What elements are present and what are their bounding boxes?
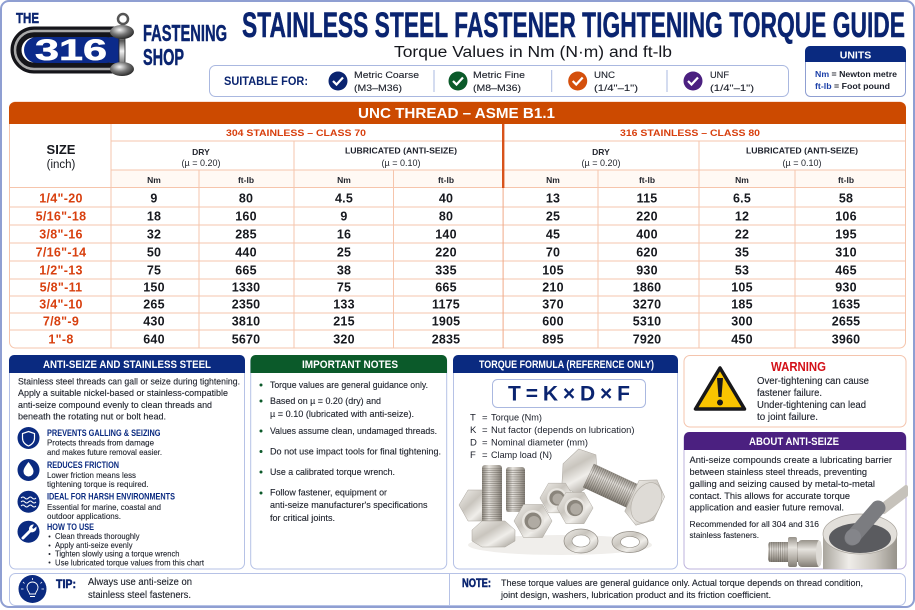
row 1/2-13 <box>39 264 857 278</box>
tip text: TIP: <box>56 577 76 591</box>
row 7/16-14 <box>36 246 857 260</box>
about text: application and easier future removal. <box>690 502 844 514</box>
row 5/16-18: 80 <box>439 210 453 224</box>
UNC: UNC <box>594 70 615 81</box>
row 3/8-16: 45 <box>546 228 560 242</box>
notes list: µ = 0.10 (lubricated with anti-seize). <box>270 409 414 420</box>
table banner: UNC THREAD – ASME B1.1 <box>358 105 555 122</box>
row 3/4-10: 1175 <box>432 298 460 312</box>
group headers <box>182 128 858 168</box>
row 1/2-13: 38 <box>337 264 351 278</box>
group headers: (µ = 0.20) <box>582 158 620 168</box>
logo: The 316 Fastening Shop: SHOP <box>143 44 184 70</box>
row 1-8: 5670 <box>232 332 260 346</box>
row 3/8-16: 16 <box>337 228 351 242</box>
row 1/4-20: 9 <box>150 192 158 206</box>
group headers: LUBRICATED (ANTI-SEIZE) <box>746 146 858 156</box>
row 3/8-16: 195 <box>835 228 857 242</box>
size column header <box>47 142 76 171</box>
row 3/8-16: 400 <box>636 228 658 242</box>
row 7/16-14: 220 <box>435 246 457 260</box>
row 5/16-18: 106 <box>835 210 857 224</box>
formula legend: D <box>470 438 477 448</box>
how to use: Use lubricated torque values from this chart <box>55 557 205 567</box>
warning text: fastener failure. <box>757 388 822 399</box>
unit header row: Nm <box>147 175 161 185</box>
row 5/16-18 <box>36 210 857 224</box>
tip text: Always use anti-seize on <box>88 577 192 588</box>
intro text: Apply a suitable nickel-based or stainless-compatible <box>18 388 228 399</box>
tip and note bar <box>10 574 906 606</box>
warning text: Over-tightening can cause <box>757 376 869 387</box>
row 1/2-13: 1/2"-13 <box>39 264 83 278</box>
formula legend: Nominal diameter (mm) <box>491 438 588 448</box>
how to use: HOW TO USE <box>47 522 94 533</box>
how to use: Tighten slowly using a torque wrench <box>55 549 180 559</box>
panel: about anti-seize <box>684 432 906 569</box>
benefit: harsh environments <box>47 492 175 521</box>
note text <box>462 576 863 601</box>
table banner <box>9 102 906 124</box>
UNC <box>568 70 638 94</box>
how to use: Clean threads thoroughly <box>55 531 140 541</box>
notes list: Follow fastener, equipment or <box>270 488 387 498</box>
unit header row: ft-lb <box>838 175 854 185</box>
row 1-8: 7920 <box>633 332 661 346</box>
panel: anti-seize and stainless steel <box>9 355 245 569</box>
icon: shield <box>18 427 40 449</box>
unit header row: Nm <box>337 175 351 185</box>
row 7/16-14: 440 <box>235 246 257 260</box>
row 7/16-14: 35 <box>735 246 749 260</box>
row 1/4-20: 13 <box>546 192 560 206</box>
benefit: harsh environments: IDEAL FOR HARSH ENVIRONMENTS <box>47 492 175 502</box>
benefit: reduces friction <box>47 460 148 489</box>
row 3/4-10: 265 <box>143 298 165 312</box>
notes list: for critical joints. <box>270 513 335 524</box>
metric coarse: (M3–M36) <box>354 83 402 94</box>
benefit: harsh environments: Essential for marine, coastal and <box>47 502 161 512</box>
group headers: LUBRICATED (ANTI-SEIZE) <box>345 146 457 156</box>
formula legend: = <box>482 425 488 436</box>
row 1/2-13: 665 <box>235 264 257 278</box>
row 5/8-11: 1860 <box>633 280 661 294</box>
how to use: Apply anti-seize evenly <box>55 540 133 550</box>
row 1/4-20: 6.5 <box>733 192 751 206</box>
row 7/8-9: 2655 <box>832 314 860 328</box>
formula legend: = <box>482 438 488 448</box>
group headers: (µ = 0.10) <box>382 158 420 168</box>
suitable for bar: SUITABLE FOR: <box>224 74 308 88</box>
icon: warning triangle <box>696 368 744 409</box>
row 7/8-9: 1905 <box>432 314 460 328</box>
unit header row <box>147 175 854 185</box>
formula legend: Clamp load (N) <box>491 450 552 461</box>
icon: water drop <box>18 459 40 481</box>
row 5/8-11: 105 <box>731 280 753 294</box>
row 3/4-10: 133 <box>333 298 355 312</box>
about text: stainless fasteners. <box>690 530 759 540</box>
unit header row: ft-lb <box>438 175 454 185</box>
tip text: stainless steel fasteners. <box>88 590 191 601</box>
row 3/8-16: 22 <box>735 228 749 242</box>
panel: anti-seize and stainless steel: ANTI-SEIZE AND STAINLESS STEEL <box>43 359 211 371</box>
unit header row: Nm <box>735 175 749 185</box>
row 5/8-11 <box>40 280 857 294</box>
subtitle: Torque Values in Nm (N·m) and ft-lb <box>394 44 672 61</box>
benefit: prevents galling: Protects threads from damage <box>47 438 154 448</box>
row 5/8-11: 5/8"-11 <box>40 280 82 294</box>
row 1-8: 2835 <box>432 332 460 346</box>
row 7/8-9: 600 <box>542 314 564 328</box>
metric fine: Metric Fine <box>473 70 525 81</box>
row 7/8-9: 5310 <box>633 314 661 328</box>
units box: Nm = Newton metre <box>815 70 898 79</box>
row 1/2-13: 930 <box>636 264 658 278</box>
UNF: (1/4"–1") <box>710 83 754 94</box>
row 5/16-18: 9 <box>340 210 348 224</box>
notes list: anti-seize manufacturer's specifications <box>270 500 428 511</box>
row 7/16-14: 310 <box>835 246 857 260</box>
about text: galling and seizing caused by metal-to-metal <box>690 479 875 490</box>
formula: T = K × D × F <box>508 383 630 406</box>
row 5/16-18: 25 <box>546 210 560 224</box>
about text: Anti-seize compounds create a lubricating barrier <box>690 455 892 466</box>
row 1-8: 895 <box>542 332 564 346</box>
warning text: Under-tightening can lead <box>757 400 866 411</box>
image: bolt <box>768 537 822 567</box>
formula legend: = <box>482 413 488 424</box>
row 1/4-20 <box>39 192 853 206</box>
group headers: DRY <box>192 147 210 157</box>
UNC: (1/4"–1") <box>594 83 638 94</box>
metric fine: (M8–M36) <box>473 83 521 94</box>
row 1-8 <box>48 332 860 346</box>
formula legend: K <box>470 425 477 436</box>
panel: warning <box>684 356 906 427</box>
group headers: DRY <box>592 147 610 157</box>
how to use <box>47 522 205 567</box>
row 1-8: 3960 <box>832 332 860 346</box>
UNF: UNF <box>710 70 729 81</box>
torque table: UNC thread <box>9 102 906 348</box>
units box: ft-lb = Foot pound <box>815 82 890 91</box>
row 1-8: 450 <box>731 332 753 346</box>
benefit: reduces friction: tightening torque is required. <box>47 479 148 489</box>
row 7/8-9: 3810 <box>232 314 260 328</box>
formula <box>492 380 646 408</box>
unit header row: ft-lb <box>238 175 254 185</box>
image: anti-seize jar and spatula <box>823 487 906 569</box>
big bolt <box>552 441 670 531</box>
row 3/8-16 <box>39 228 857 242</box>
benefit: prevents galling <box>47 428 162 457</box>
row 7/16-14: 70 <box>546 246 560 260</box>
benefit: prevents galling: and makes future removal easier. <box>47 447 162 457</box>
about text: between stainless steel threads, preventing <box>690 467 867 478</box>
panel: torque formula <box>453 355 678 569</box>
formula legend: Torque (Nm) <box>491 413 542 424</box>
notes list: Do not use impact tools for final tightening. <box>270 446 441 458</box>
row 7/16-14: 25 <box>337 246 351 260</box>
row 5/16-18: 12 <box>735 210 749 224</box>
warning text <box>757 376 869 423</box>
row 3/8-16: 3/8"-16 <box>39 228 83 242</box>
row 1/4-20: 40 <box>439 192 453 206</box>
metric coarse: Metric Coarse <box>354 70 419 81</box>
row 3/4-10: 2350 <box>232 298 260 312</box>
row 7/8-9: 430 <box>143 314 165 328</box>
row 5/16-18: 5/16"-18 <box>36 210 86 224</box>
tip text <box>56 577 192 601</box>
row 5/8-11: 1330 <box>232 280 260 294</box>
row 1/4-20: 58 <box>839 192 853 206</box>
icon: waves <box>18 491 40 513</box>
panel: important notes <box>250 355 447 569</box>
row 3/4-10: 3/4"-10 <box>39 298 83 312</box>
formula legend: = <box>482 450 488 461</box>
panel: about anti-seize: ABOUT ANTI-SEIZE <box>749 436 839 448</box>
row 1/4-20: 115 <box>637 192 657 206</box>
row 7/8-9: 7/8"-9 <box>43 314 79 328</box>
group headers: (µ = 0.10) <box>783 158 821 168</box>
logo: The 316 Fastening Shop: FASTENING <box>143 20 227 46</box>
row 3/4-10: 370 <box>542 298 564 312</box>
icon: light bulb <box>18 575 46 603</box>
row 1/4-20: 1/4"-20 <box>39 192 83 206</box>
metric fine <box>448 70 525 94</box>
size column header: (inch) <box>47 159 76 171</box>
notes list: Values assume clean, undamaged threads. <box>270 426 437 437</box>
notes list: Use a calibrated torque wrench. <box>270 467 395 478</box>
row 1-8: 320 <box>333 332 355 346</box>
row 1-8: 640 <box>143 332 165 346</box>
intro text: beneath the rotating nut or bolt head. <box>18 412 166 422</box>
benefit: harsh environments: outdoor applications. <box>47 511 121 521</box>
logo: The 316 Fastening Shop <box>15 10 227 76</box>
row 5/8-11: 210 <box>542 280 564 294</box>
formula legend: T <box>470 413 476 424</box>
notes list <box>270 380 441 524</box>
row 5/16-18: 18 <box>147 210 161 224</box>
UNF <box>684 70 754 94</box>
row 1/2-13: 53 <box>735 264 749 278</box>
row 7/16-14: 50 <box>147 246 161 260</box>
row 3/4-10 <box>39 298 860 312</box>
formula legend: Nut factor (depends on lubrication) <box>491 425 634 436</box>
row 1/2-13: 75 <box>147 264 161 278</box>
group headers: (µ = 0.20) <box>182 158 220 168</box>
row 7/8-9 <box>43 314 860 328</box>
row 3/4-10: 185 <box>731 298 753 312</box>
group headers: 316 STAINLESS – CLASS 80 <box>620 128 760 139</box>
about text <box>690 455 892 540</box>
row 7/16-14: 620 <box>636 246 658 260</box>
units box <box>805 46 906 96</box>
row 1-8: 1"-8 <box>48 332 74 346</box>
row 7/8-9: 300 <box>731 314 753 328</box>
row 3/4-10: 1635 <box>832 298 860 312</box>
note text: joint design, washers, lubrication product and its friction coefficient. <box>500 590 771 601</box>
row 5/8-11: 75 <box>337 280 351 294</box>
row 5/8-11: 150 <box>143 280 165 294</box>
logo: The 316 Fastening Shop: THE <box>16 10 39 27</box>
benefit: reduces friction: REDUCES FRICTION <box>47 460 119 471</box>
icon: wrench <box>18 521 40 543</box>
row 3/8-16: 140 <box>435 228 457 242</box>
washers <box>564 529 598 553</box>
row 1/4-20: 80 <box>239 192 253 206</box>
row 7/8-9: 215 <box>333 314 355 328</box>
benefit: reduces friction: Lower friction means less <box>47 470 136 480</box>
row 7/16-14: 7/16"-14 <box>36 246 86 260</box>
row 5/16-18: 220 <box>636 210 658 224</box>
suitable for bar <box>210 66 788 96</box>
row 1/2-13: 465 <box>835 264 857 278</box>
notes list: Torque values are general guidance only. <box>270 380 428 391</box>
formula legend <box>470 413 634 461</box>
metric coarse <box>328 70 419 94</box>
logo: The 316 Fastening Shop: 316 <box>35 34 107 67</box>
row 1/2-13: 105 <box>542 264 564 278</box>
intro text: anti-seize compound evenly to clean threads and <box>18 400 212 411</box>
panel: torque formula: TORQUE FORMULA (REFERENCE ONLY) <box>479 359 654 371</box>
unit header row: ft-lb <box>639 175 655 185</box>
warning text: to joint failure. <box>757 412 818 423</box>
group headers: 304 STAINLESS – CLASS 70 <box>226 128 366 139</box>
note text: These torque values are general guidance only. Actual torque depends on thread condition, <box>501 578 863 589</box>
row 5/8-11: 665 <box>435 280 457 294</box>
upright bolts <box>506 467 525 512</box>
row 1/4-20: 4.5 <box>335 192 353 206</box>
bullets <box>260 384 262 494</box>
about text: Recommended for all 304 and 316 <box>690 519 819 529</box>
intro text: Stainless steel threads can gall or seize during tightening. <box>18 376 240 388</box>
row 5/8-11: 930 <box>835 280 857 294</box>
panel: important notes: IMPORTANT NOTES <box>302 359 398 371</box>
row 5/16-18: 160 <box>235 210 257 224</box>
notes list: Based on µ = 0.20 (dry) and <box>270 396 381 407</box>
image: bolts, nuts and washers <box>459 441 670 555</box>
formula legend: F <box>470 450 476 461</box>
row 3/8-16: 285 <box>235 228 257 242</box>
units box: UNITS <box>840 50 871 62</box>
row 1/2-13: 335 <box>435 264 457 278</box>
intro text <box>18 376 240 422</box>
benefit: prevents galling: PREVENTS GALLING & SEIZING <box>47 428 160 439</box>
size column header: SIZE <box>47 142 76 157</box>
row 3/4-10: 3270 <box>633 298 661 312</box>
about text: contact. This allows for accurate torque <box>690 491 850 502</box>
unit header row: Nm <box>546 175 560 185</box>
note text: NOTE: <box>462 576 491 590</box>
panel: warning: WARNING <box>771 359 826 374</box>
row 3/8-16: 32 <box>147 228 161 242</box>
